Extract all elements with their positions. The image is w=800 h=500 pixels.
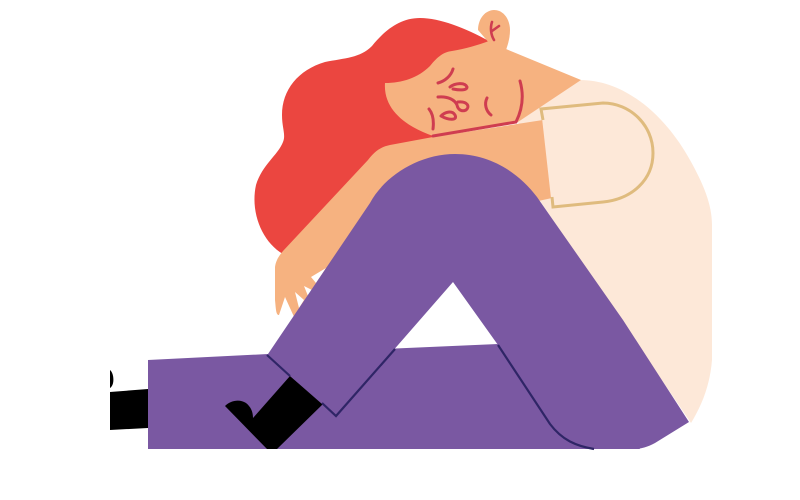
trouser fold lines [267,345,594,449]
arm and hand [275,120,552,330]
jaw line [433,81,522,136]
far foot [110,370,148,430]
sleeve [541,103,653,207]
thigh and shin [268,154,689,449]
ear detail [491,22,499,40]
sock and near foot [225,376,323,449]
nose crease [429,109,433,129]
closed eye creases [450,84,467,90]
sleeve outline [541,103,653,207]
facial lines [429,69,522,136]
eyebrow [438,69,453,83]
cheek crease [486,98,491,115]
hair [254,18,489,254]
gaps between fingers [295,268,326,308]
shirt body [518,80,712,423]
lower leg [148,344,640,449]
ear [478,10,510,50]
face and neck [385,41,581,136]
